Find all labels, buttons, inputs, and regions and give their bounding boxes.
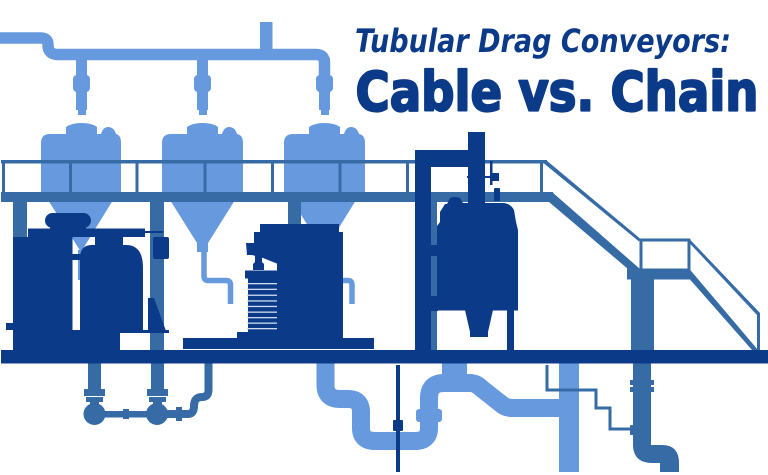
left machine	[6, 213, 169, 350]
top feed pipes	[0, 22, 333, 115]
main deck	[1, 350, 768, 364]
upper platform and railing	[1, 160, 553, 352]
hopper tanks	[41, 123, 365, 304]
middle machine	[183, 224, 374, 349]
staircase and landing	[544, 160, 760, 351]
centre reactor machine	[415, 132, 518, 350]
lower mid blue pipes	[84, 362, 679, 472]
lower light blue pipes	[326, 363, 579, 472]
lower thin dark line	[393, 365, 403, 472]
